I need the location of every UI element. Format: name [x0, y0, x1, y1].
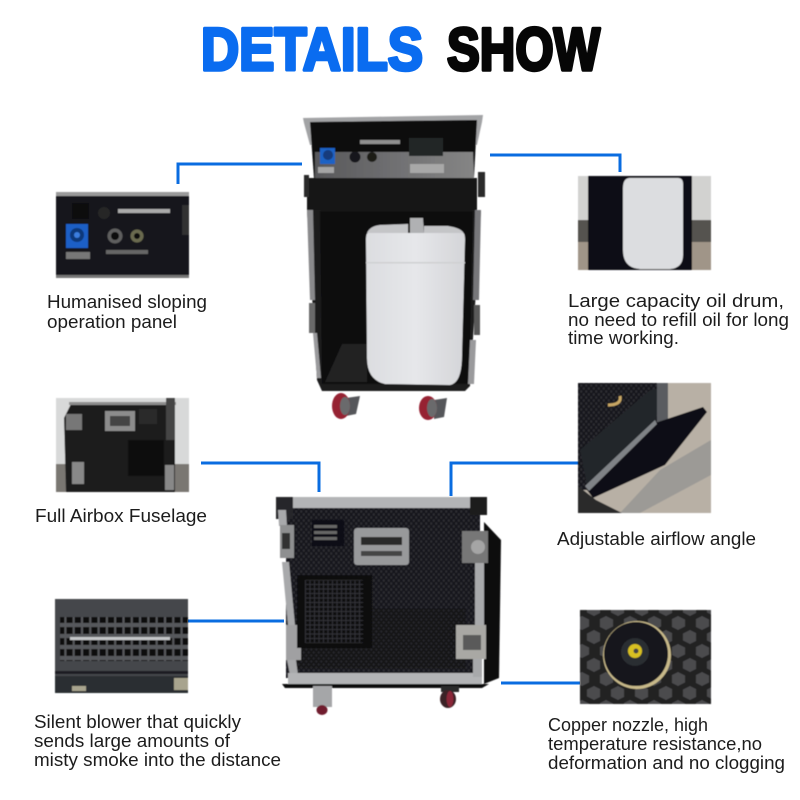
panel: airflow angle photo — [578, 383, 711, 513]
connector line: blower — [188, 620, 284, 622]
connector line: nozzle — [501, 682, 580, 684]
panel: airbox photo — [56, 398, 189, 492]
vent — [312, 520, 344, 546]
case body — [307, 210, 481, 391]
text: blower: misty smoke into the distance — [34, 749, 281, 770]
lid frame — [303, 115, 483, 145]
grille — [297, 575, 372, 648]
panel: oil drum photo — [578, 176, 711, 270]
main unit: open case with oil drum — [303, 115, 485, 420]
side panel — [484, 522, 501, 684]
connector line: airflow angle — [451, 463, 580, 496]
oil drum — [367, 224, 408, 233]
latches — [280, 525, 294, 558]
text: oil drum: time working. — [568, 327, 679, 348]
text: operation panel: operation panel — [47, 311, 177, 332]
title: DETAILS — [201, 16, 423, 83]
text: nozzle: deformation and no clogging — [548, 752, 785, 773]
text: nozzle: temperature resistance,no — [548, 733, 762, 754]
black band — [307, 178, 477, 210]
text: blower: Silent blower that quickly — [34, 711, 242, 732]
text: oil drum: no need to refill oil for long — [568, 309, 789, 330]
handle — [354, 528, 409, 565]
text: operation panel: Humanised sloping — [47, 291, 207, 312]
case body — [286, 506, 480, 678]
panel: nozzle photo — [580, 610, 711, 704]
silver frame — [277, 497, 487, 508]
wheels — [332, 393, 447, 420]
text: oil drum — [568, 290, 789, 348]
text: airflow angle: Adjustable airflow angle — [557, 528, 756, 549]
panel: blower photo — [55, 599, 188, 693]
panel: operation panel photo — [56, 192, 189, 278]
text: blower — [34, 711, 281, 770]
connector line: airbox — [201, 463, 319, 492]
text: airbox: Full Airbox Fuselage — [35, 505, 207, 526]
main unit: rear view of air box — [276, 497, 501, 715]
text: nozzle — [548, 714, 785, 773]
text: oil drum: Large capacity oil drum, — [568, 290, 784, 311]
text: nozzle: Copper nozzle, high — [548, 714, 708, 735]
connector line: operation panel — [178, 164, 302, 184]
text: operation panel — [47, 291, 207, 332]
control panel — [315, 152, 474, 178]
title: SHOW — [447, 16, 600, 83]
title — [201, 16, 600, 83]
wheels — [313, 686, 332, 707]
connector line: oil drum — [490, 155, 620, 172]
text: blower: sends large amounts of — [34, 730, 231, 751]
